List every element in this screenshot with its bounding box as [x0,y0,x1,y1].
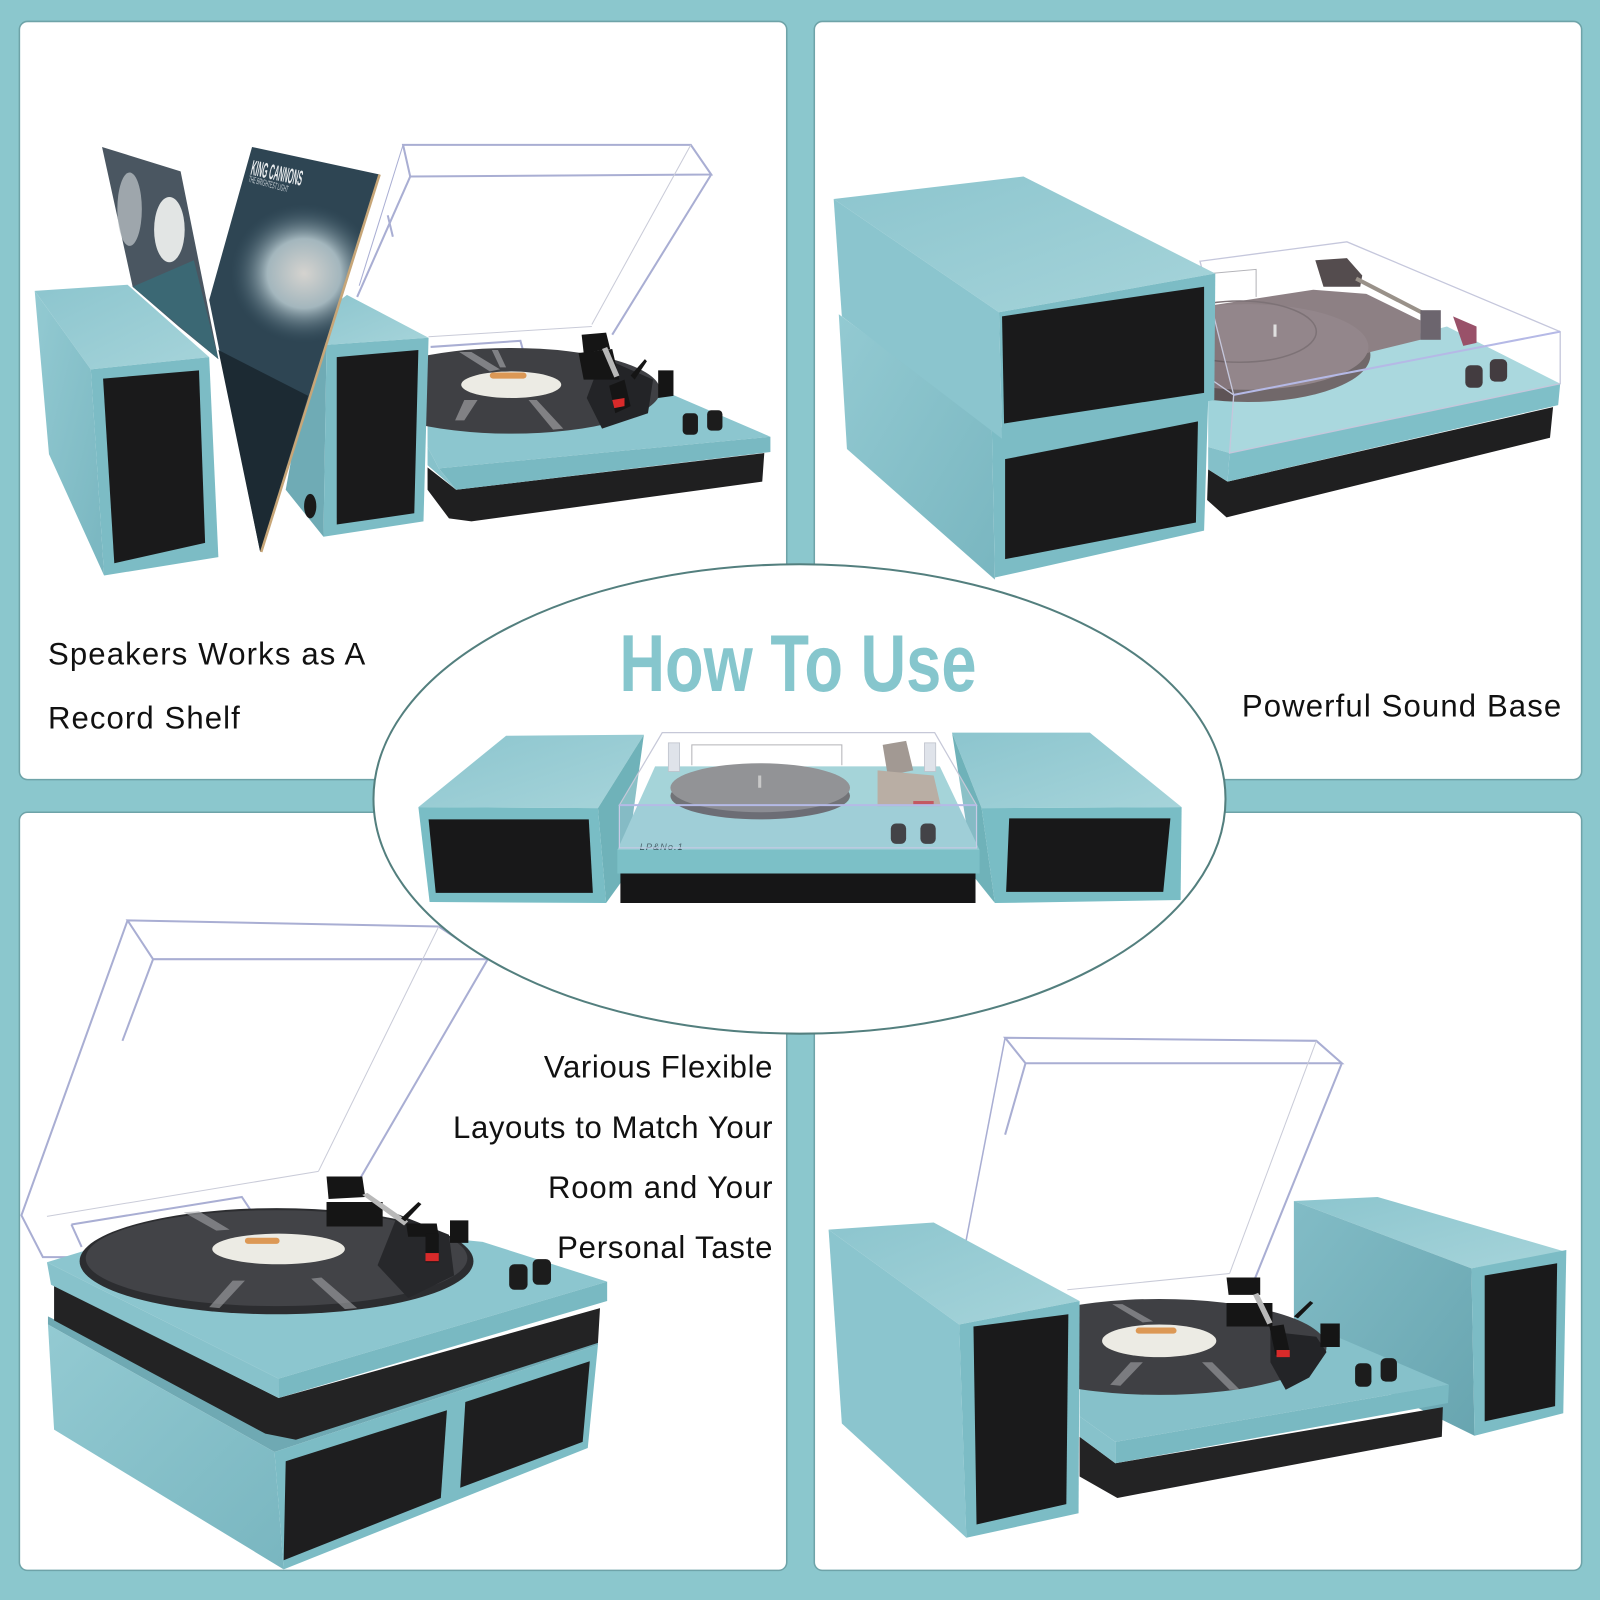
right grille [460,1361,590,1488]
speaker grille [429,819,593,893]
left speaker [418,735,644,903]
sleeve cover [102,147,218,359]
dust cover lid raised [964,1038,1342,1291]
record label [1102,1324,1216,1357]
record label [212,1234,345,1264]
speaker block under turntable [48,1316,598,1569]
brand mark: LP&No.1 [640,842,684,852]
panel: speakers as record shelf [19,21,787,780]
ellipse background [373,564,1226,1034]
control knobs [683,410,722,435]
tonearm plate [1213,290,1420,367]
caption: Speakers Works as A [48,636,366,671]
record label [461,371,561,398]
control knobs [891,823,936,844]
turntable top surface [1208,327,1560,453]
speaker front frame [982,807,1182,903]
speaker side [952,733,995,903]
caption: Record Shelf [48,701,240,736]
platter top [670,763,850,812]
vinyl record [86,1210,467,1306]
block side [48,1324,284,1569]
center ellipse callout [373,564,1226,1034]
tonearm [579,333,673,413]
right speaker [1294,1197,1566,1436]
platter rings [1163,301,1316,362]
panel: powerful sound base [814,21,1582,780]
black base [620,873,976,903]
label logo [490,372,527,379]
lid front top edge [1234,332,1560,395]
vinyl record [362,348,660,434]
turntable top surface [428,367,770,468]
speaker side [839,314,995,580]
dust cover [619,733,977,848]
speaker front frame [992,400,1208,578]
turntable [992,1278,1449,1498]
sleeve cover [209,147,380,552]
arm rod [1356,279,1423,313]
sleeve edge [261,174,380,552]
speaker grille [1005,421,1198,559]
block top edge [48,1316,598,1452]
speaker grille [973,1314,1068,1524]
tonearm [878,741,941,806]
speaker top [834,177,1215,312]
speaker front frame [91,357,218,576]
black base [1080,1407,1443,1498]
title: How To Use [619,619,977,709]
turntable black base [428,453,764,521]
vinyl record rim [80,1208,473,1314]
spindle [758,776,761,788]
speaker grille [1485,1263,1557,1421]
lid front edge [619,804,977,806]
speaker top [1294,1197,1566,1268]
speaker grille [1006,818,1170,892]
turntable front face [439,437,770,490]
caption: Room and Your [548,1170,772,1205]
dust cover lid raised [357,145,711,352]
top surface [617,766,980,850]
platter seen through lid [1126,308,1370,402]
platter [670,772,850,819]
speaker side [1294,1201,1474,1436]
panel background [814,812,1582,1570]
turntable left face [1208,447,1230,482]
panel background [19,812,787,1570]
record sleeve rear [102,147,218,359]
record sleeve front: King Cannons [209,147,380,552]
record sheen [455,350,563,430]
top surface [1080,1327,1449,1442]
left speaker [829,1222,1080,1538]
spindle [1273,324,1277,337]
speaker top [35,285,209,369]
tonearm [1315,258,1477,346]
dust cover [1200,242,1560,453]
top surface [47,1214,607,1379]
black base [54,1285,600,1440]
speaker top [952,733,1182,808]
record reflection [1270,1332,1327,1390]
panel background [814,21,1582,780]
speaker side [834,199,1002,439]
panel: side speakers layout [814,812,1582,1570]
speaker front frame [959,1301,1080,1538]
dust cover lid raised [21,920,488,1257]
speaker top [418,735,644,808]
caption: Powerful Sound Base [1242,688,1561,723]
front face [617,850,980,873]
turntable front face [1228,384,1560,482]
lid front [619,805,977,848]
speaker foot [304,494,316,518]
speaker front frame [323,338,429,537]
upper speaker [834,177,1215,439]
lid body [1200,242,1560,453]
right face [279,1282,607,1398]
platter top [1128,304,1368,390]
panel background [19,21,787,780]
sleeve artwork [154,197,185,262]
lid back wire [1210,269,1256,297]
left speaker [35,285,218,576]
caption: Layouts to Match Your [453,1110,772,1145]
caption: Personal Taste [557,1230,772,1265]
label logo mark [245,1238,280,1244]
turntable black base [1207,407,1553,517]
label logo [1136,1328,1177,1334]
tonearm [327,1177,468,1262]
speaker top [829,1222,1080,1324]
speaker front frame [418,807,606,903]
control knobs [509,1259,551,1290]
turntable with closed lid [1126,242,1560,517]
right speaker [286,295,429,537]
panel: flexible layouts [19,812,787,1570]
turntable [617,733,980,903]
lid top and back [619,733,977,805]
right speaker [952,733,1182,903]
left face [1080,1416,1115,1463]
back wire [692,745,842,765]
sleeve lower tint [133,260,218,359]
record sheen [184,1211,357,1309]
lid front edge [1211,380,1234,395]
tonearm [1227,1278,1340,1357]
speaker side [598,735,644,903]
cartridge [1453,316,1477,346]
record sleeve front: King Cannons: THE BRIGHTEST LIGHT [247,174,290,194]
speaker grille [337,350,418,524]
front face [1115,1385,1449,1463]
control knobs [1355,1358,1397,1387]
speaker front frame [1471,1250,1566,1436]
turntable left face [428,447,456,490]
center turntable set [418,733,1182,903]
speaker grille [1002,287,1204,423]
sleeve artwork [117,172,142,246]
lower speaker [839,314,1208,580]
control knobs [1465,359,1507,388]
turntable [47,1177,607,1440]
speaker top [306,295,429,345]
record reflection [587,357,653,429]
speaker front frame [999,273,1215,439]
sleeve lower reflection [218,350,308,552]
record sleeve front: King Cannons: KING CANNONS [249,156,305,191]
block front frame [274,1345,598,1569]
arm head [1315,258,1362,287]
caption: Various Flexible [544,1050,772,1085]
speaker grille [103,370,205,563]
speaker side [35,291,104,576]
record sheen [1110,1304,1240,1390]
record reflection [378,1214,454,1298]
speaker side [286,345,327,537]
head shell [1420,310,1441,340]
left grille [284,1410,447,1560]
right hinge [924,743,936,771]
speaker side [829,1230,966,1538]
left hinge [668,743,680,771]
left face [47,1262,279,1398]
turntable [362,333,770,521]
vinyl record [992,1299,1327,1395]
storm cloud artwork [238,212,358,336]
